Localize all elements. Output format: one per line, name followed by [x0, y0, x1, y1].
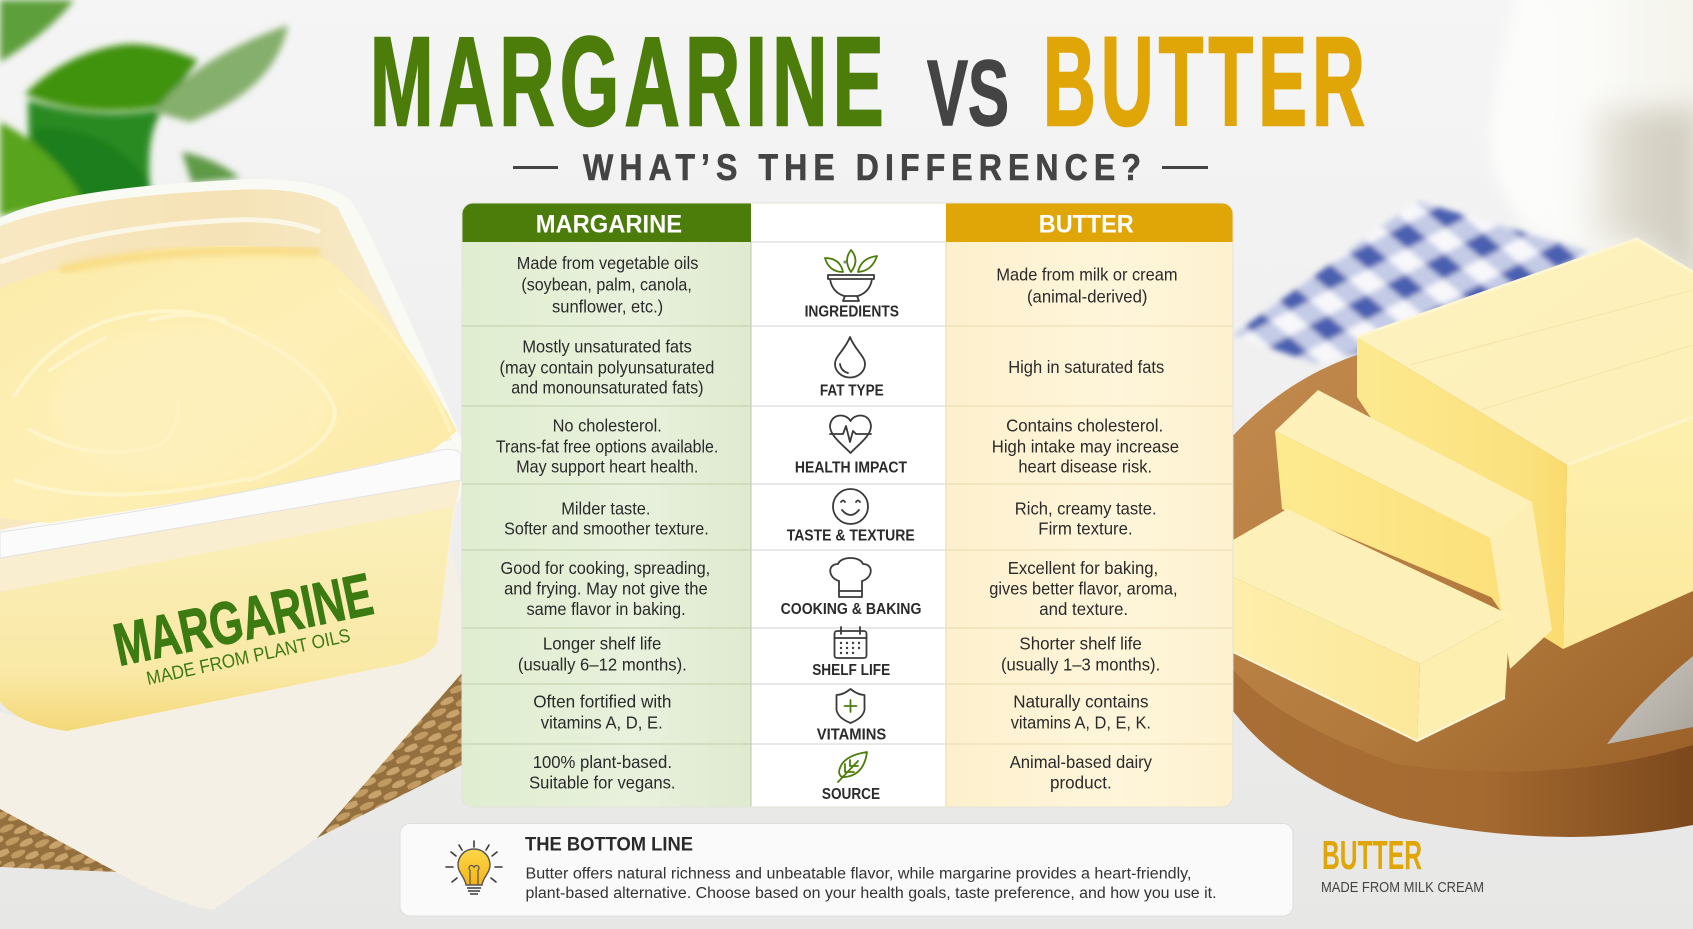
photo: knife blade	[1607, 656, 1693, 744]
row: vitamins: Naturally contains	[1013, 692, 1149, 712]
row: health impact: Contains cholesterol.	[1006, 416, 1163, 436]
row: source: product.	[1050, 773, 1112, 793]
row: vitamins: Often fortified with	[533, 692, 672, 712]
panel: the bottom line: plant-based alternative. Choose based on your health goals, taste preference, and how you use it.	[526, 885, 1216, 902]
row: ingredients	[517, 250, 1178, 321]
comparison table	[462, 203, 1233, 807]
row: vitamins: vitamins A, D, E, K.	[1011, 713, 1151, 733]
photo: butter block	[1357, 239, 1693, 649]
row: taste and texture: Firm texture.	[1038, 519, 1133, 539]
icon: shield	[836, 689, 864, 723]
row: taste and texture: TASTE & TEXTURE	[787, 528, 915, 545]
row: health impact: May support heart health.	[516, 457, 698, 477]
row: health impact: Trans-fat free options available.	[496, 436, 718, 456]
panel: the bottom line: THE BOTTOM LINE	[525, 834, 693, 856]
row: fat type: High in saturated fats	[1008, 357, 1165, 377]
title: VS	[927, 41, 1009, 145]
row: vitamins: VITAMINS	[817, 726, 886, 743]
row: shelf life: SHELF LIFE	[812, 662, 890, 679]
row: cooking and baking: and frying. May not give the	[504, 579, 708, 599]
subtitle: WHAT’S THE DIFFERENCE?	[583, 147, 1147, 188]
row: taste and texture: Milder taste.	[561, 498, 650, 518]
tub label: MARGARINE	[108, 560, 378, 690]
row: vitamins	[533, 689, 1151, 743]
row: source: SOURCE	[822, 786, 880, 803]
row: health impact: heart disease risk.	[1018, 457, 1152, 477]
row: health impact: High intake may increase	[992, 436, 1179, 456]
row: shelf life: (usually 6–12 months).	[518, 654, 687, 674]
table backgrounds	[462, 203, 1233, 807]
row: ingredients: Made from vegetable oils	[517, 253, 699, 273]
icon: smile	[833, 489, 868, 524]
row: fat type: Mostly unsaturated fats	[522, 336, 692, 356]
row: source: Animal-based dairy	[1010, 752, 1152, 772]
panel: the bottom line: Butter offers natural richness and unbeatable flavor, while margarine provides a heart-friendly,	[526, 866, 1192, 882]
row: taste and texture: Softer and smoother texture.	[504, 519, 709, 539]
photo: milk jug	[1490, 0, 1693, 290]
row: source	[529, 752, 1152, 803]
row: ingredients: (animal-derived)	[1027, 286, 1147, 306]
photo: linen cloth	[0, 552, 462, 910]
row: source: 100% plant-based.	[533, 752, 672, 772]
photo: wicker mat	[0, 673, 462, 872]
icon: leaf	[838, 752, 867, 782]
caption: butter: MADE FROM MILK CREAM	[1321, 879, 1484, 896]
icon: calendar	[834, 627, 866, 658]
photo: blue checked cloth	[1233, 201, 1590, 364]
photo: butter slices	[1233, 390, 1552, 741]
row: ingredients: INGREDIENTS	[805, 304, 899, 321]
row: shelf life	[518, 627, 1160, 679]
row: shelf life: Longer shelf life	[543, 634, 661, 654]
row: cooking and baking: gives better flavor, aroma,	[989, 579, 1178, 599]
row: taste and texture	[504, 489, 1157, 545]
title: BUTTER	[1043, 11, 1370, 152]
row: cooking and baking	[500, 558, 1178, 619]
icon: chef hat	[830, 558, 871, 597]
icon: plant bowl	[825, 250, 877, 301]
row: fat type: (may contain polyunsaturated	[500, 357, 714, 377]
caption: butter: BUTTER	[1322, 832, 1422, 878]
row: ingredients: (soybean, palm, canola,	[521, 275, 692, 295]
panel: the bottom line	[400, 824, 1293, 916]
icon: lightbulb	[446, 841, 502, 894]
row: ingredients: sunflower, etc.)	[552, 296, 663, 316]
row: vitamins: vitamins A, D, E.	[541, 713, 663, 733]
row: fat type: FAT TYPE	[820, 383, 884, 400]
row: shelf life: Shorter shelf life	[1019, 634, 1142, 654]
column headers: MARGARINE	[536, 210, 682, 238]
column headers	[536, 210, 1134, 238]
title: MARGARINE	[370, 11, 889, 152]
cream swirl	[15, 290, 450, 495]
row: health impact: HEALTH IMPACT	[795, 460, 908, 477]
row: cooking and baking: Good for cooking, spreading,	[500, 558, 710, 578]
photo: wooden board	[1220, 300, 1693, 837]
row: fat type	[500, 336, 1165, 400]
photo: margarine tub	[0, 179, 462, 731]
row: shelf life: (usually 1–3 months).	[1001, 654, 1160, 674]
tub label: MARGARINE: MARGARINE	[108, 560, 378, 679]
row: health impact: No cholesterol.	[553, 416, 662, 436]
row: health impact	[496, 416, 1179, 477]
row: cooking and baking: and texture.	[1039, 599, 1128, 619]
row: source: Suitable for vegans.	[529, 773, 676, 793]
icon: drop	[835, 337, 865, 378]
row: cooking and baking: same flavor in baking.	[526, 599, 686, 619]
row: cooking and baking: Excellent for baking,	[1008, 558, 1158, 578]
tub body	[0, 500, 455, 731]
photo: green leaves	[0, 0, 288, 216]
column headers: BUTTER	[1039, 210, 1134, 238]
tub label: MARGARINE: MADE FROM PLANT OILS	[145, 625, 352, 690]
row: ingredients: Made from milk or cream	[996, 264, 1178, 284]
icon: heart	[830, 416, 871, 453]
row: cooking and baking: COOKING & BAKING	[781, 601, 921, 618]
row: taste and texture: Rich, creamy taste.	[1015, 498, 1157, 518]
row: fat type: and monounsaturated fats)	[511, 378, 704, 398]
